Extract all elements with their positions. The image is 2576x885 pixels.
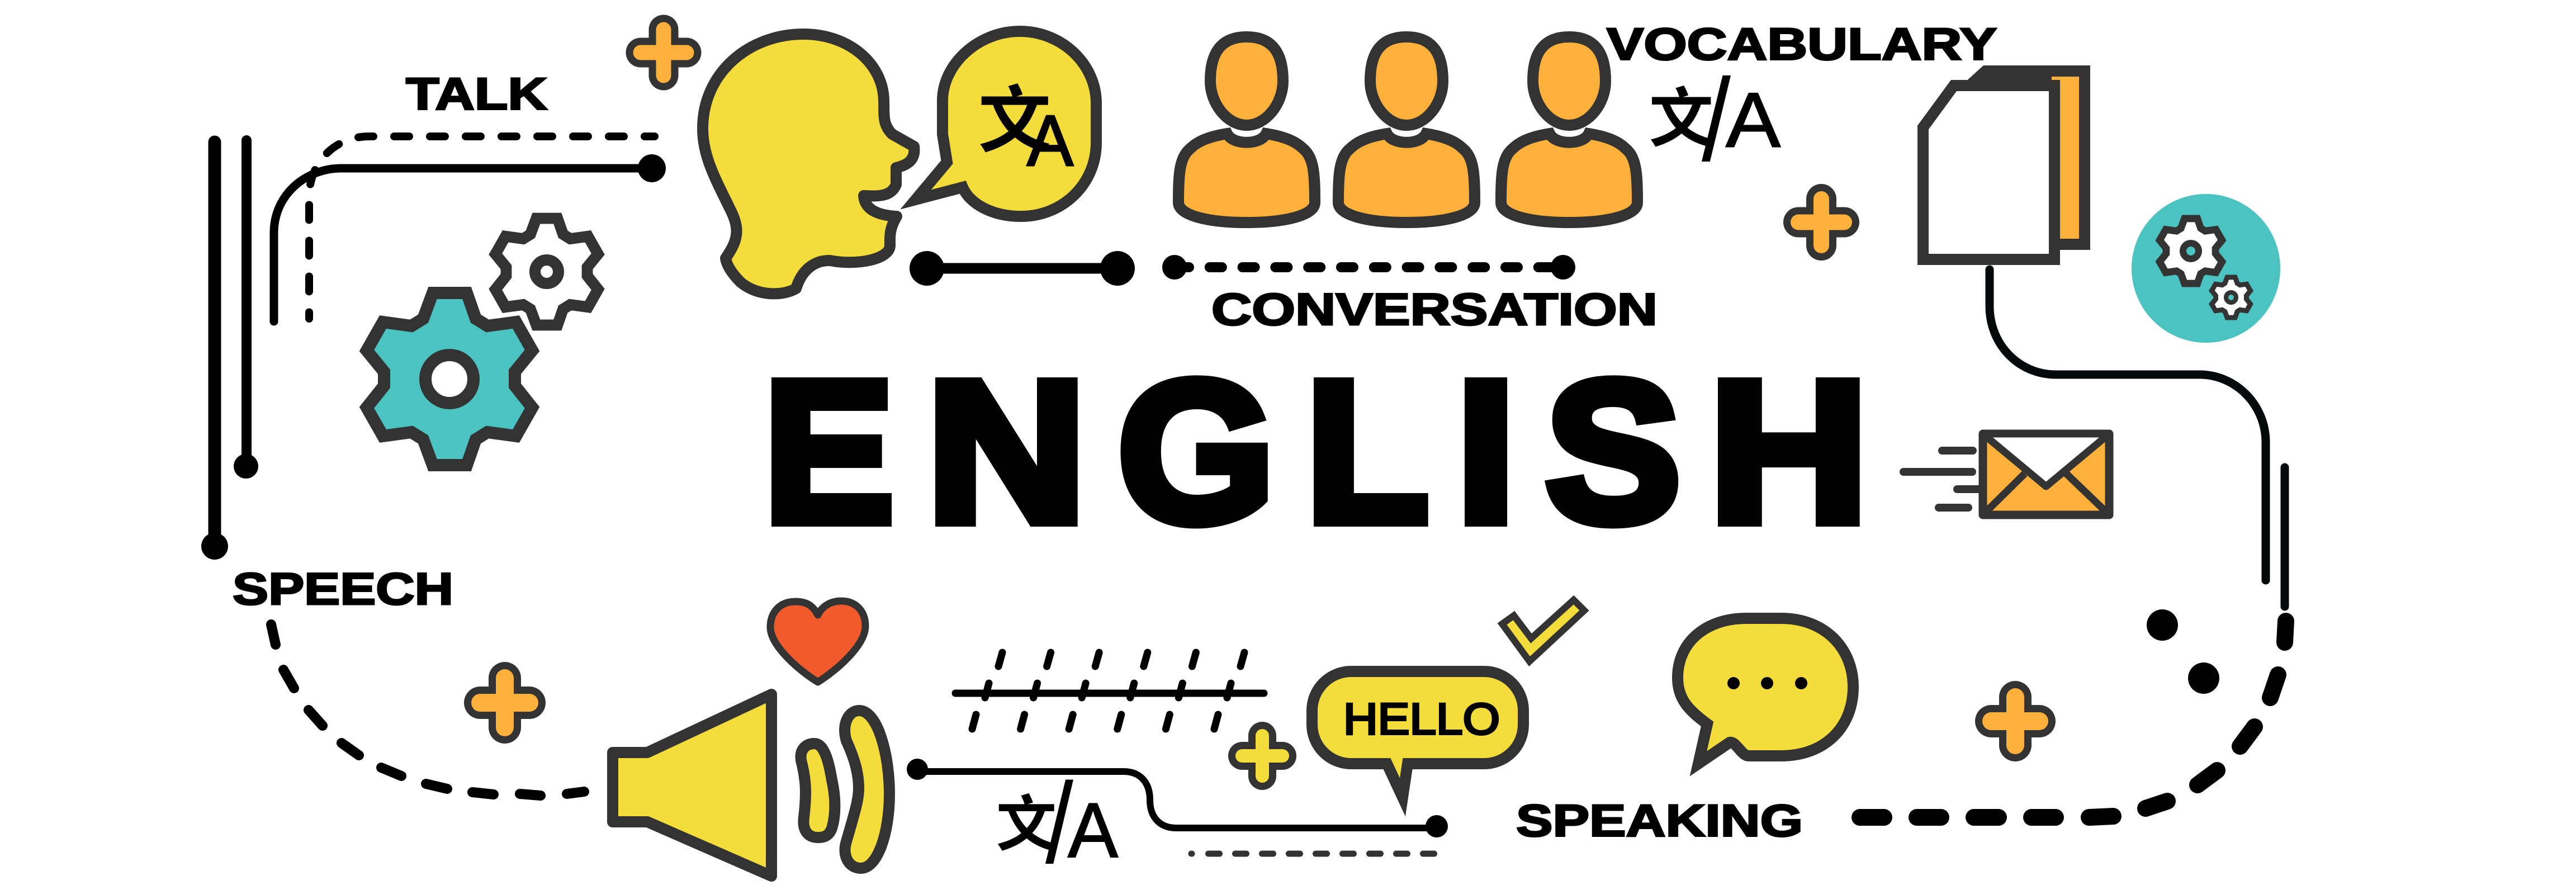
- label: CONVERSATION: CONVERSATION: [1211, 285, 1658, 335]
- dashed curve bottom right: [1860, 621, 2286, 817]
- icon: HELLO speech bubble: HELLO: [1343, 694, 1500, 744]
- icon: translation speech bubble: [916, 31, 1096, 216]
- icon: speech bubble with dots: [1678, 618, 1853, 764]
- icon: envelope with speed lines: [1903, 434, 2109, 515]
- solid curved talk connector: [274, 154, 666, 321]
- connector: solid under bubble: [910, 251, 1135, 286]
- icon: megaphone speaker: [613, 694, 771, 876]
- icon: check mark: [1502, 600, 1584, 661]
- decorative dots right: [2147, 609, 2219, 694]
- dotted line bottom: [1191, 851, 1434, 856]
- title: ENGLISH: E: [764, 339, 894, 564]
- dashed curved talk connector: [309, 136, 655, 319]
- icon: plus top: [641, 30, 686, 75]
- icon: three people: [1178, 37, 1637, 223]
- label: SPEECH: SPEECH: [233, 564, 453, 614]
- icon: sound wave inner: [801, 744, 835, 837]
- title: ENGLISH: L: [1306, 340, 1429, 564]
- icon: translate symbol bottom: A: [1068, 787, 1118, 874]
- label: VOCABULARY: VOCABULARY: [1607, 19, 1997, 69]
- icon: translate symbol bottom: 文: [996, 776, 1057, 863]
- connector: dashed conversation: [1162, 255, 1575, 280]
- icon: documents: [1923, 71, 2085, 259]
- icon: translate symbol top right: 文: [1649, 67, 1713, 160]
- icon: HELLO speech bubble: [1312, 671, 1523, 797]
- icon: plus yellow: [1242, 736, 1282, 776]
- icon: speaking head: [703, 34, 914, 294]
- title: ENGLISH: I: [1456, 340, 1516, 564]
- icon: translate symbol bottom: /: [1045, 759, 1073, 885]
- connector: curved line under hatch: [907, 759, 1448, 837]
- icon: gears in teal circle: [2132, 194, 2280, 343]
- title: ENGLISH: S: [1546, 340, 1680, 564]
- connector: curve from documents: [1990, 269, 2266, 580]
- hatched line pattern: [955, 652, 1264, 729]
- icon: teal gear: [367, 293, 532, 465]
- icon: plus bottom left: [480, 678, 529, 727]
- left vertical lines with end dots: [201, 140, 258, 560]
- icon: translation speech bubble: 文: [978, 62, 1051, 167]
- title: ENGLISH: [764, 339, 1868, 564]
- person 2: [1338, 37, 1475, 223]
- icon: translate symbol top right: A: [1726, 77, 1781, 163]
- icon: plus bottom right: [1991, 697, 2039, 745]
- icon: translate symbol bottom: [996, 759, 1118, 885]
- icon: translate symbol top right: [1649, 54, 1781, 186]
- person 3: [1501, 37, 1637, 223]
- connector: short right vertical line: [2281, 467, 2289, 607]
- label: SPEAKING: SPEAKING: [1516, 796, 1803, 846]
- icon: sound wave outer: [845, 711, 889, 868]
- label: TALK: TALK: [406, 69, 547, 120]
- title: ENGLISH: G: [1118, 340, 1275, 564]
- icon: heart: [770, 601, 865, 682]
- icon: translation speech bubble: A: [1027, 101, 1073, 181]
- dashed curve bottom left: [271, 624, 584, 796]
- icon: white gear: [495, 219, 598, 325]
- icon: translate symbol top right: /: [1702, 54, 1731, 186]
- icon: plus right of translate: [1798, 199, 1844, 245]
- title: ENGLISH: N: [927, 340, 1086, 564]
- title: ENGLISH: H: [1710, 339, 1868, 564]
- person 1: [1178, 37, 1315, 223]
